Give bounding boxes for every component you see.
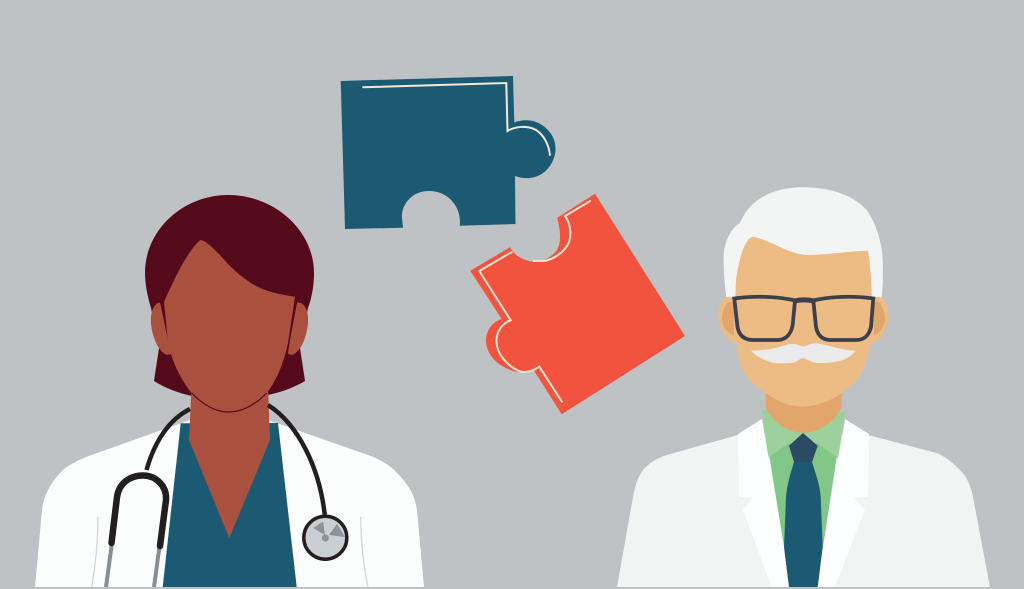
hair [724,187,883,330]
glasses [734,297,873,340]
shirt [766,435,840,547]
tie knot [789,433,818,462]
ears [151,302,171,355]
white coat [35,420,424,587]
chin line [192,393,267,412]
ears [718,297,740,344]
puzzle piece: red [470,194,685,414]
right lapel [818,419,869,587]
tie [784,462,823,587]
man doctor [617,187,990,587]
puzzle piece: blue [341,76,556,229]
hair [145,195,314,396]
left lapel [738,419,789,587]
neck [189,385,270,538]
neck [766,385,842,433]
stethoscope [106,405,347,587]
coat folds [92,517,368,587]
hair strands over ears [160,296,298,345]
face [164,240,295,412]
coat [617,435,990,587]
scrub top [163,423,297,587]
collar [762,410,846,458]
mustache [751,343,856,363]
face [735,237,872,407]
woman doctor [35,195,424,587]
